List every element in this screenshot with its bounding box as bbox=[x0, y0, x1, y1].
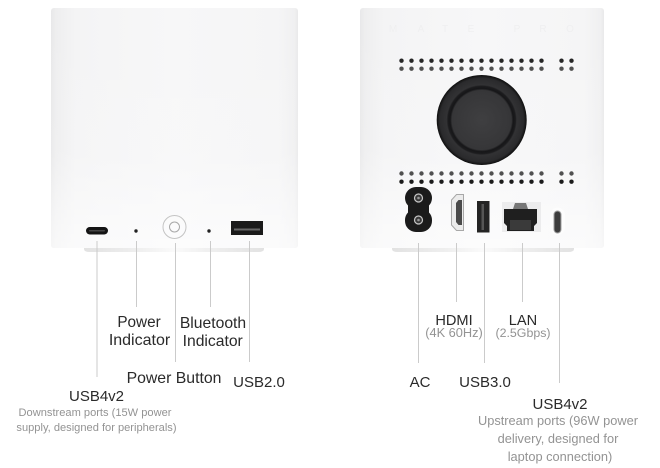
icon: bluetooth indicator bbox=[207, 229, 211, 233]
left device foot bbox=[84, 246, 264, 252]
icon: speaker bbox=[437, 75, 527, 165]
icon: power indicator bbox=[134, 229, 138, 233]
icon: USB-C port bbox=[86, 227, 108, 234]
bottom vent holes bbox=[399, 171, 574, 184]
brand text: O bbox=[566, 24, 574, 35]
label: USB4v2 downstream: Downstream ports (15W power bbox=[19, 407, 172, 419]
top vent holes bbox=[399, 58, 574, 71]
label: Power Indicator: Power bbox=[117, 314, 161, 331]
leader lines bbox=[97, 241, 560, 383]
icon: USB-C upstream port bbox=[550, 208, 565, 235]
brand text: T bbox=[442, 24, 448, 35]
brand text: A bbox=[418, 24, 425, 35]
label: LAN bbox=[495, 313, 551, 340]
label: USB4v2 downstream: USB4v2 bbox=[69, 388, 124, 405]
left device body bbox=[51, 8, 298, 248]
right device foot bbox=[392, 246, 574, 252]
label: LAN: (2.5Gbps) bbox=[495, 326, 551, 340]
label: USB4v2 upstream: delivery, designed for bbox=[498, 431, 619, 446]
icon: USB-A port bbox=[231, 221, 263, 235]
label: HDMI: HDMI bbox=[435, 313, 473, 329]
right device bbox=[360, 8, 604, 252]
label: USB4v2 upstream bbox=[478, 396, 639, 464]
label: Bluetooth Indicator: Bluetooth bbox=[180, 315, 246, 332]
label: USB4v2 upstream: laptop connection) bbox=[508, 449, 612, 464]
label: USB4v2 upstream: Upstream ports (96W power bbox=[478, 413, 639, 428]
brand text: E bbox=[468, 24, 475, 35]
label: Power Indicator: Indicator bbox=[109, 332, 171, 349]
label: Power Button: Power Button bbox=[127, 370, 221, 387]
icon: USB3.0 port bbox=[477, 201, 490, 232]
icon: LAN port bbox=[502, 202, 541, 232]
label: AC: AC bbox=[410, 374, 431, 391]
left device bbox=[51, 8, 298, 252]
brand text: P bbox=[514, 24, 521, 35]
label: USB2.0: USB2.0 bbox=[233, 374, 285, 391]
label: HDMI bbox=[425, 313, 483, 340]
label: HDMI: (4K 60Hz) bbox=[425, 325, 483, 340]
icon: AC port bbox=[405, 187, 432, 232]
brand text bbox=[389, 24, 574, 35]
label: USB4v2 downstream: supply, designed for peripherals) bbox=[16, 422, 177, 434]
brand text: M bbox=[389, 24, 397, 35]
label: Bluetooth Indicator: Indicator bbox=[183, 333, 243, 350]
label: USB3.0: USB3.0 bbox=[459, 374, 511, 391]
label: Power Indicator bbox=[109, 314, 171, 349]
label: LAN: LAN bbox=[509, 313, 537, 329]
icon: power button bbox=[163, 216, 186, 238]
right device body bbox=[360, 8, 604, 248]
label: USB4v2 downstream bbox=[16, 388, 177, 434]
icon: HDMI port bbox=[452, 194, 464, 230]
brand text: R bbox=[539, 24, 547, 35]
label: USB4v2 upstream: USB4v2 bbox=[532, 396, 588, 413]
label: Bluetooth Indicator bbox=[180, 315, 246, 350]
